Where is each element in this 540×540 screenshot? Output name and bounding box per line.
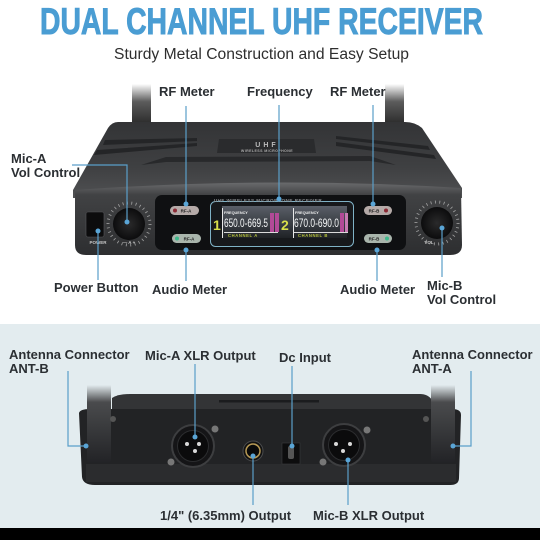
channel 1 readout: 650.0-669.5 <box>224 216 268 230</box>
LCD screen: UHF WIRELESS MICROPHONE RECEIVER <box>214 198 322 203</box>
label: Audio Meter right: Audio Meter <box>340 282 415 297</box>
label: Antenna Connector ANT-A: ANT-A <box>412 361 452 376</box>
label: Mic-A Vol Control: Mic-A <box>11 151 47 166</box>
power switch <box>86 212 107 245</box>
AF-B button <box>364 234 392 243</box>
channel 2 readout <box>293 208 348 238</box>
lighter lower strip <box>86 464 456 482</box>
RF-B button: RF-B <box>369 208 380 214</box>
label: Mic-A Vol Control <box>11 151 130 224</box>
rear screw right <box>423 416 429 422</box>
vents left <box>94 138 197 155</box>
label: Antenna Connector ANT-B: ANT-B <box>9 361 49 376</box>
label: Audio Meter left <box>152 248 227 297</box>
label: Mic-B Vol Control: Mic-B <box>427 278 462 293</box>
label: Dc Input: Dc Input <box>279 350 332 365</box>
label: Frequency <box>247 84 314 202</box>
Mic-B volume knob <box>416 202 458 245</box>
Mic-B XLR connector <box>320 424 370 466</box>
receiver rear top cover <box>112 394 432 412</box>
UHF badge <box>217 139 316 153</box>
Mic-A volume knob: — A + <box>123 240 136 245</box>
label: 1/4 inch Output: 1/4" (6.35mm) Output <box>160 508 292 523</box>
bottom black bar <box>0 528 540 540</box>
label: RF Meter right <box>330 84 386 206</box>
label: Audio Meter left: Audio Meter <box>152 282 227 297</box>
display bezel <box>155 195 406 250</box>
Mic-A volume knob <box>108 203 150 245</box>
label: Audio Meter right <box>340 248 415 297</box>
label: Mic-A XLR Output: Mic-A XLR Output <box>145 348 256 363</box>
UHF badge: WIRELESS MICROPHONE <box>241 149 293 153</box>
icon: right antenna <box>385 84 404 128</box>
1/4 inch jack <box>243 441 263 461</box>
channel 2 readout: CHANNEL B <box>298 233 328 238</box>
AF-A button <box>172 234 201 243</box>
AF-A button: RF-A <box>184 236 195 242</box>
label: RF Meter left <box>159 84 215 206</box>
front view of receiver <box>73 84 462 255</box>
label: Mic-A Vol Control: Vol Control <box>11 165 80 180</box>
channel 1 readout <box>222 208 279 238</box>
DC input <box>282 443 300 464</box>
label: RF Meter right: RF Meter <box>330 84 386 99</box>
RF-A button <box>170 206 199 215</box>
channel 1 readout: FREQUENCY <box>224 211 248 215</box>
RF-A button: RF-A <box>181 208 192 214</box>
panel: rear view background <box>0 324 540 528</box>
label: Mic-B XLR Output: Mic-B XLR Output <box>313 508 425 523</box>
label: Mic-B XLR Output <box>313 458 425 523</box>
rear screw left <box>110 416 116 422</box>
UHF badge: UHF <box>255 142 279 149</box>
front ridge <box>141 156 396 165</box>
AF-B button: RF-B <box>369 236 380 242</box>
rear housing <box>79 409 461 485</box>
subtitle: Sturdy Metal Construction and Easy Setup <box>114 46 409 63</box>
channel 2 readout: FREQUENCY <box>295 211 319 215</box>
label: Antenna Connector ANT-A <box>412 347 533 448</box>
vents right <box>336 136 436 159</box>
label: Mic-B Vol Control: Vol Control <box>427 292 496 307</box>
channel 2 numeral: 2 <box>281 217 289 233</box>
label: 1/4 inch Output <box>160 454 292 523</box>
receiver top cover <box>73 122 462 198</box>
channel 2 readout: 670.0-690.0 <box>294 216 339 230</box>
label: Antenna Connector ANT-B <box>9 347 130 448</box>
icon: left antenna <box>132 84 151 128</box>
icon: rear antenna A <box>431 385 455 463</box>
label: RF Meter left: RF Meter <box>159 84 215 99</box>
label: Antenna Connector ANT-A: Antenna Connector <box>412 347 533 362</box>
label: Frequency: Frequency <box>247 84 314 99</box>
label: Power Button <box>54 228 139 295</box>
label: Mic-A XLR Output <box>145 348 256 440</box>
rear view of receiver <box>79 385 461 485</box>
label: Dc Input <box>279 350 332 448</box>
channel 1 readout: CHANNEL A <box>228 233 258 238</box>
RF-B button <box>364 206 392 215</box>
label: Antenna Connector ANT-B: Antenna Connector <box>9 347 130 362</box>
label: Power Button: Power Button <box>54 280 139 295</box>
top ridge <box>219 400 319 402</box>
LCD screen <box>210 198 354 246</box>
icon: rear antenna B <box>87 385 111 463</box>
label: Mic-B Vol Control <box>427 226 496 307</box>
channel 1 numeral: 1 <box>213 217 221 233</box>
Mic-B volume knob: VOL <box>424 240 434 245</box>
Mic-A XLR connector <box>168 425 218 467</box>
power switch: POWER <box>89 240 107 245</box>
receiver front panel <box>75 182 462 255</box>
